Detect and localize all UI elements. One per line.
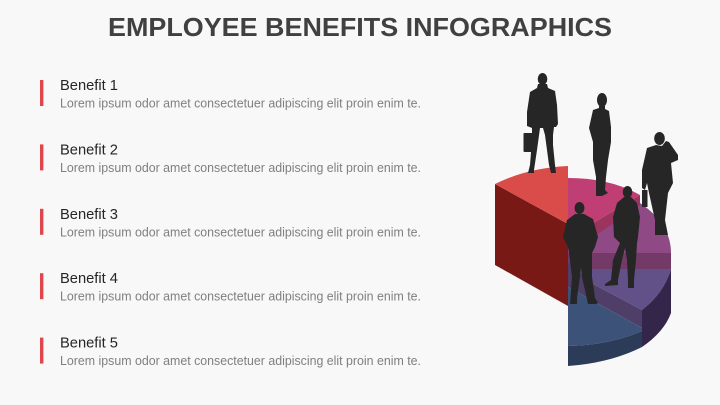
benefit 5: Lorem ipsum odor amet consectetuer adipiscing elit proin enim te. xyxy=(60,354,421,368)
benefit 4 xyxy=(40,271,421,304)
people silhouettes xyxy=(524,73,678,304)
benefit 5 xyxy=(40,336,421,368)
benefit 4: Benefit 4 xyxy=(60,271,118,287)
benefit 2: Benefit 2 xyxy=(60,142,118,158)
benefit 5: Benefit 5 xyxy=(60,336,118,352)
benefit 1: Lorem ipsum odor amet consectetuer adipiscing elit proin enim te. xyxy=(60,96,421,110)
benefit 3: Benefit 3 xyxy=(60,207,118,223)
benefit 1 xyxy=(40,78,421,110)
benefit list xyxy=(40,78,421,368)
violet slice xyxy=(568,262,671,347)
benefit 1: Benefit 1 xyxy=(60,78,118,94)
person on phone xyxy=(642,132,678,235)
purple slice xyxy=(568,203,671,269)
benefit 4: Lorem ipsum odor amet consectetuer adipiscing elit proin enim te. xyxy=(60,290,421,304)
blue slice xyxy=(568,287,642,366)
front left person xyxy=(563,202,598,304)
red slice xyxy=(495,166,568,306)
benefit 2 xyxy=(40,142,421,175)
pink slice xyxy=(568,178,640,236)
standing woman xyxy=(589,93,611,196)
3D pie chart xyxy=(495,166,671,366)
front right person xyxy=(605,186,640,288)
benefit 2: Lorem ipsum odor amet consectetuer adipiscing elit proin enim te. xyxy=(60,161,421,175)
benefit 3 xyxy=(40,207,421,239)
person with briefcase xyxy=(524,73,558,173)
benefit 3: Lorem ipsum odor amet consectetuer adipiscing elit proin enim te. xyxy=(60,225,421,239)
title: EMPLOYEE BENEFITS INFOGRAPHICS xyxy=(108,12,612,42)
